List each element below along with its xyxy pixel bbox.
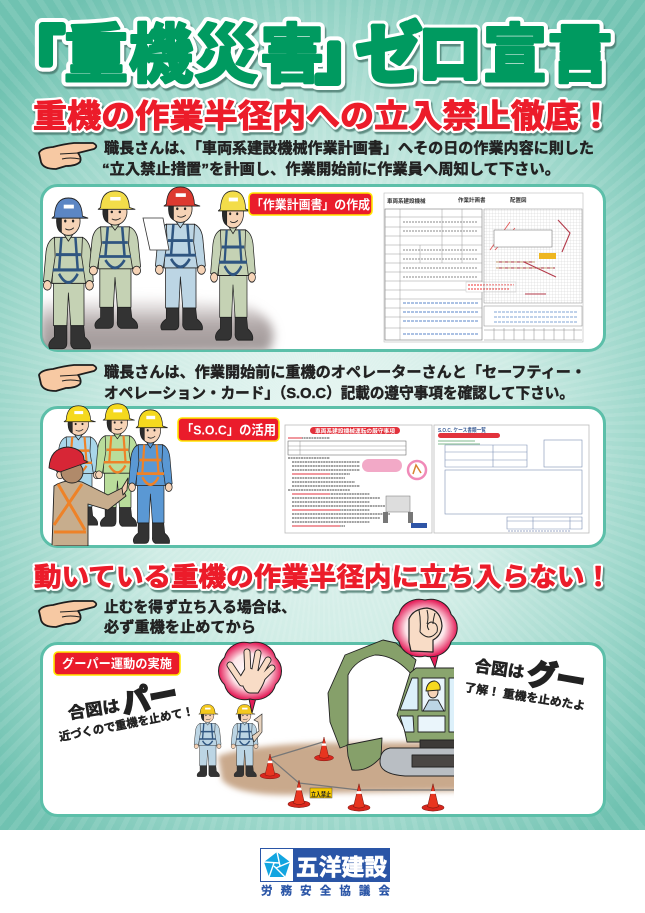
- ground shadow: [40, 298, 274, 354]
- icon: pointing hand 2: [39, 365, 96, 391]
- sign: no entry: [310, 788, 332, 798]
- document: S.O.C case form: [434, 425, 589, 533]
- cone 3: [314, 737, 334, 761]
- callout: par: 近づくので重機を止めて！: [58, 704, 195, 744]
- worker: yellow helmet back left: [57, 406, 100, 525]
- document: work plan form: [384, 193, 583, 342]
- heading: do not enter: 動いている重機の作業半径内に立ち入らない！: [34, 562, 612, 592]
- title: ゼロ: [356, 17, 483, 91]
- instruction text 3: [104, 599, 296, 636]
- label: work plan: [249, 193, 372, 215]
- icon: pointing hand 1: [39, 143, 96, 169]
- bubble: fist: [393, 599, 457, 668]
- cone 2: [288, 780, 310, 808]
- instruction text 2: オペレーション・カード」（S.O.C）記載の遵守事項を確認して下さい。: [104, 384, 574, 402]
- logo: Penta-Ocean: 五洋建設: [296, 854, 387, 880]
- document: work plan form: 作業計画書: [458, 196, 486, 204]
- worker: yellow helmet blue suit: [129, 410, 172, 543]
- instruction text 2: 職長さんは、作業開始前に重機のオペレーターさんと「セーフティー・: [104, 363, 586, 381]
- instruction text 1: “立入禁止措置”を計画し、作業開始前に作業員へ周知して下さい。: [102, 160, 560, 178]
- panel: goo-par campaign: [42, 599, 604, 816]
- instruction text 3: 必ず重機を止めてから: [104, 618, 256, 636]
- callout: par: 合図は: [67, 697, 121, 723]
- worker: standing left: [194, 704, 221, 777]
- panel: S.O.C: [42, 404, 604, 546]
- worker: yellow helmet green suit: [96, 404, 139, 526]
- document: S.O.C case form: S.O.C. ケース書類一覧: [438, 426, 486, 434]
- instruction text 1: [102, 139, 594, 178]
- title: 重機災害: [64, 19, 324, 91]
- callout: par: [58, 678, 195, 744]
- title: 「: [4, 23, 64, 90]
- title: ゼロ: [356, 17, 483, 91]
- callout: par: パー: [119, 678, 180, 721]
- title: 宣言: [483, 19, 612, 91]
- title: 重機災害: [64, 19, 324, 91]
- title: 」: [316, 23, 376, 90]
- label: campaign: グーパー運動の実施: [62, 656, 172, 671]
- cone 5: [422, 784, 444, 811]
- callout: goo: [464, 657, 588, 713]
- cone 1: [260, 754, 280, 779]
- subtitle: 重機の作業半径内への立入禁止徹底！: [33, 98, 613, 134]
- plan sheet held by foreman: [143, 218, 169, 250]
- worker: signalling: [231, 704, 258, 777]
- sign: no entry: 立入禁止: [311, 790, 331, 798]
- subtitle: 重機の作業半径内への立入禁止徹底！: [33, 98, 613, 134]
- excavator: [328, 640, 460, 776]
- callout: goo: 了解！ 重機を止めたよ: [464, 680, 586, 713]
- callout: goo: 合図は: [473, 657, 525, 682]
- logo: Penta-Ocean: 労務安全協議会: [261, 884, 390, 898]
- label: S.O.C: 「S.O.C」の活用: [181, 422, 276, 438]
- label: campaign: [54, 652, 180, 675]
- instruction text 1: 職長さんは、「車両系建設機械作業計画書」へその日の作業内容に則した: [104, 139, 594, 157]
- worker: yellow helmet right: [211, 191, 255, 340]
- title: 「: [4, 23, 64, 90]
- instruction text 3: 止むを得ず立ち入る場合は、: [104, 599, 296, 616]
- document: work plan form: 配置図: [510, 197, 527, 204]
- bubble: open hand: [218, 642, 282, 713]
- document: S.O.C rules: 車両系建設機械運転の厳守事項: [315, 427, 396, 435]
- cone 4: [348, 784, 370, 811]
- label: work plan: 「作業計画書」の作成: [251, 197, 370, 212]
- panel: work plan: [40, 186, 604, 354]
- logo: Penta-Ocean: [260, 848, 390, 898]
- title: [4, 17, 612, 91]
- raised hand: [252, 714, 262, 742]
- worker: foreman from behind: [49, 447, 128, 546]
- heading: do not enter: 動いている重機の作業半径内に立ち入らない！: [34, 562, 612, 592]
- title: 」: [316, 23, 376, 90]
- icon: pointing hand 3: [39, 601, 96, 627]
- rope barrier: [270, 742, 454, 790]
- instruction text 2: [104, 363, 586, 402]
- worker: yellow helmet left: [89, 191, 141, 328]
- document: S.O.C rules: [285, 425, 432, 533]
- ground area: [218, 742, 460, 795]
- label: S.O.C: [178, 418, 279, 441]
- document: work plan form: 車両系建設機械: [387, 197, 426, 205]
- title: 宣言: [483, 19, 612, 91]
- worker: red helmet foreman: [155, 187, 205, 330]
- worker: blue helmet: [43, 198, 93, 349]
- callout: goo: グー: [525, 657, 588, 700]
